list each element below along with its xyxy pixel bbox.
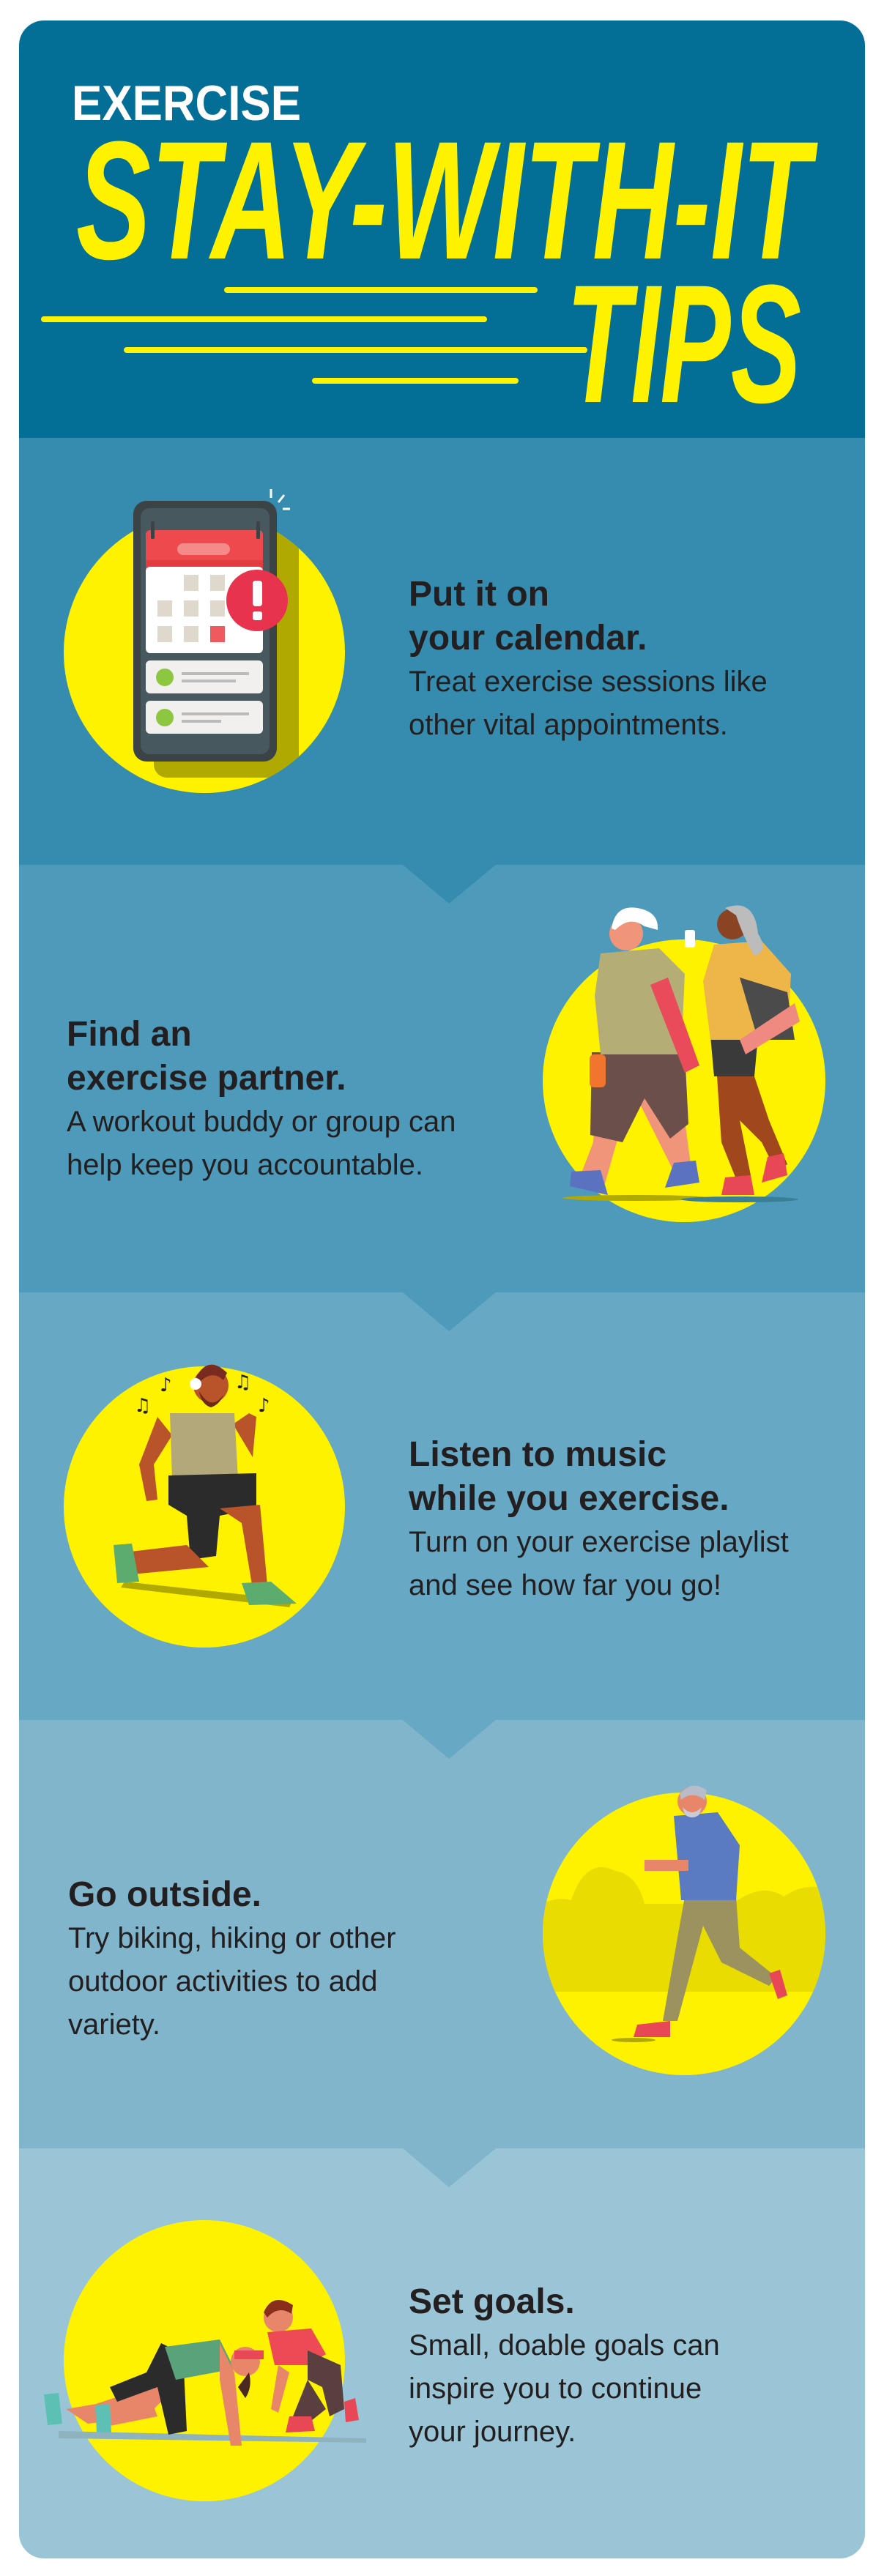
text: music: while you exercise. bbox=[409, 1479, 729, 1518]
illustration: man with headphones lunging: ♪ bbox=[258, 1395, 270, 1417]
text: goals: Small, doable goals can bbox=[409, 2329, 720, 2361]
arrow notch bbox=[403, 865, 496, 904]
header panel bbox=[19, 21, 865, 438]
illustration: man with headphones lunging bbox=[64, 1365, 345, 1648]
text: music: and see how far you go! bbox=[409, 1569, 721, 1601]
arrow notch bbox=[403, 2148, 496, 2187]
panel: music bbox=[19, 1292, 865, 1720]
text: outside: Try biking, hiking or other bbox=[68, 1922, 396, 1954]
text: outside: outdoor activities to add bbox=[68, 1965, 377, 1998]
text: music bbox=[409, 1435, 789, 1601]
text: partner bbox=[67, 1015, 456, 1181]
text: partner: exercise partner. bbox=[67, 1059, 346, 1098]
text: goals bbox=[409, 2282, 720, 2448]
text: calendar bbox=[409, 575, 768, 741]
text: music: Listen to music bbox=[409, 1435, 666, 1474]
text: partner: help keep you accountable. bbox=[67, 1149, 423, 1181]
panel: set goals bbox=[19, 2148, 865, 2558]
arrow notch bbox=[403, 1292, 496, 1331]
text: calendar: Treat exercise sessions like bbox=[409, 666, 768, 698]
title: EXERCISE: EXERCISE bbox=[72, 75, 301, 131]
text: partner: Find an bbox=[67, 1015, 192, 1054]
illustration: man with headphones lunging: ♫ bbox=[234, 1371, 251, 1393]
text: music: Turn on your exercise playlist bbox=[409, 1526, 789, 1558]
illustration: runner bbox=[542, 1786, 828, 2075]
text: outside: variety. bbox=[68, 2009, 160, 2041]
illustration: two walkers bbox=[543, 906, 825, 1222]
speed lines bbox=[44, 290, 584, 381]
illustration: man with headphones lunging: ♫ bbox=[134, 1395, 151, 1417]
text: goals: inspire you to continue bbox=[409, 2372, 702, 2405]
text: calendar: your calendar. bbox=[409, 619, 647, 658]
arrow notch bbox=[403, 1720, 496, 1759]
text: goals: your journey. bbox=[409, 2416, 576, 2448]
text: calendar: other vital appointments. bbox=[409, 709, 728, 741]
text: goals: Set goals. bbox=[409, 2282, 575, 2321]
illustration: man with headphones lunging: ♪ bbox=[160, 1374, 172, 1396]
panel: calendar tip bbox=[19, 438, 865, 865]
text: calendar: Put it on bbox=[409, 575, 549, 614]
text: outside: Go outside. bbox=[68, 1875, 261, 1914]
text: outside bbox=[68, 1875, 396, 2041]
text: partner: A workout buddy or group can bbox=[67, 1106, 456, 1138]
icon: phone calendar bbox=[64, 489, 345, 793]
illustration: trainer and woman crawling bbox=[44, 2220, 366, 2501]
panel: go outside bbox=[19, 1720, 865, 2148]
panel: exercise partner bbox=[19, 865, 865, 1292]
